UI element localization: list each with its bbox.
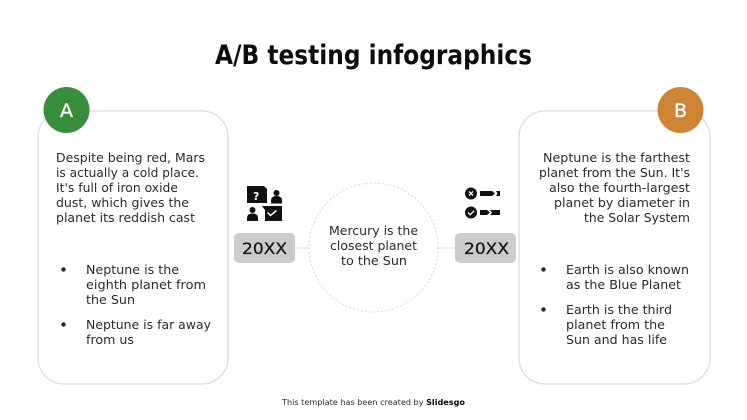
date label: left [234,233,295,263]
badge: A: A [60,100,73,122]
bullet list: A [61,262,212,347]
badge: B: B [674,100,687,122]
panel: B [519,87,710,384]
panel: A [38,87,228,384]
center circle: to the Sun [341,253,407,268]
bullet list: B [541,262,689,347]
text block: Neptune: Neptune is the farthest [543,150,690,165]
bullet list: A: Neptune is far away [86,317,212,332]
bullet list: B: Earth is also known [566,262,689,277]
bullet list: A: from us [86,332,134,347]
center circle [309,183,438,312]
date label: left: 20XX [242,239,287,258]
text block: Neptune: the Solar System [584,210,690,225]
bullet list: B: Sun and has life [566,332,667,347]
badge: A [44,87,90,133]
text block: Neptune: planet from the Sun. It's [539,165,690,180]
text block: Neptune [539,150,690,225]
text block: Mars: planet its reddish cast [56,210,195,225]
text block: Neptune: planet by diameter in [554,195,690,210]
date label: right: 20XX [464,239,509,258]
icon: A/B people with question and check: ? [253,190,259,203]
bullet list: A: eighth planet from [86,277,206,292]
date label: right [455,233,516,263]
icon: checklist options [465,188,500,218]
bullet list: B: as the Blue Planet [566,277,681,292]
badge: B [658,87,704,133]
footer credit: This template has been created by Slidesgo [281,398,465,407]
text block: Mars: Despite being red, Mars [56,150,205,165]
center circle: closest planet [330,238,417,253]
text block: Mars: is actually a cold place. [56,165,199,180]
text block: Mars [56,150,205,225]
bullet list: A: Neptune is the [86,262,179,277]
text block: Mars: dust, which gives the [56,195,189,210]
bullet list: B: planet from the [566,317,665,332]
connector lines [295,247,455,249]
text block: Neptune: also the fourth-largest [549,180,690,195]
bullet list: A: the Sun [86,292,135,307]
title: A/B testing infographics [215,40,532,71]
icon: A/B people with question and check [247,186,282,221]
text block: Mars: It's full of iron oxide [56,180,178,195]
center circle: Mercury is the [329,223,418,238]
bullet list: B: Earth is the third [566,302,672,317]
